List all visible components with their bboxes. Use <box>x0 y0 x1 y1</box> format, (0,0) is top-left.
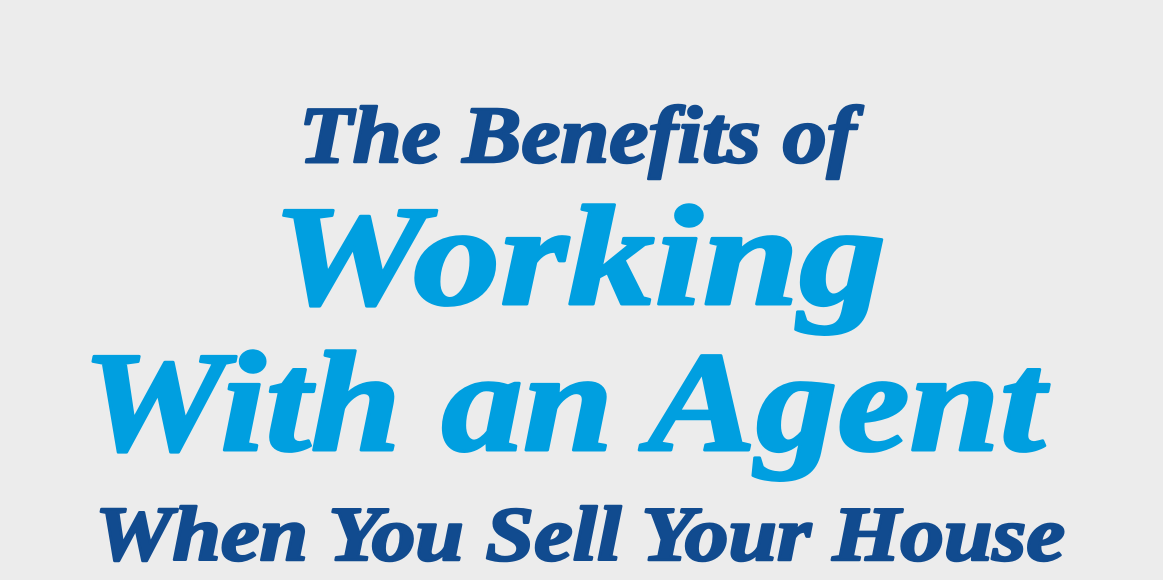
heading line: When You Sell Your House: When You Sell Your House <box>95 491 1065 577</box>
heading line: The Benefits of: The Benefits of <box>299 92 864 180</box>
heading line: Working: Working <box>272 177 886 335</box>
heading line: With an Agent: With an Agent <box>82 323 1050 481</box>
